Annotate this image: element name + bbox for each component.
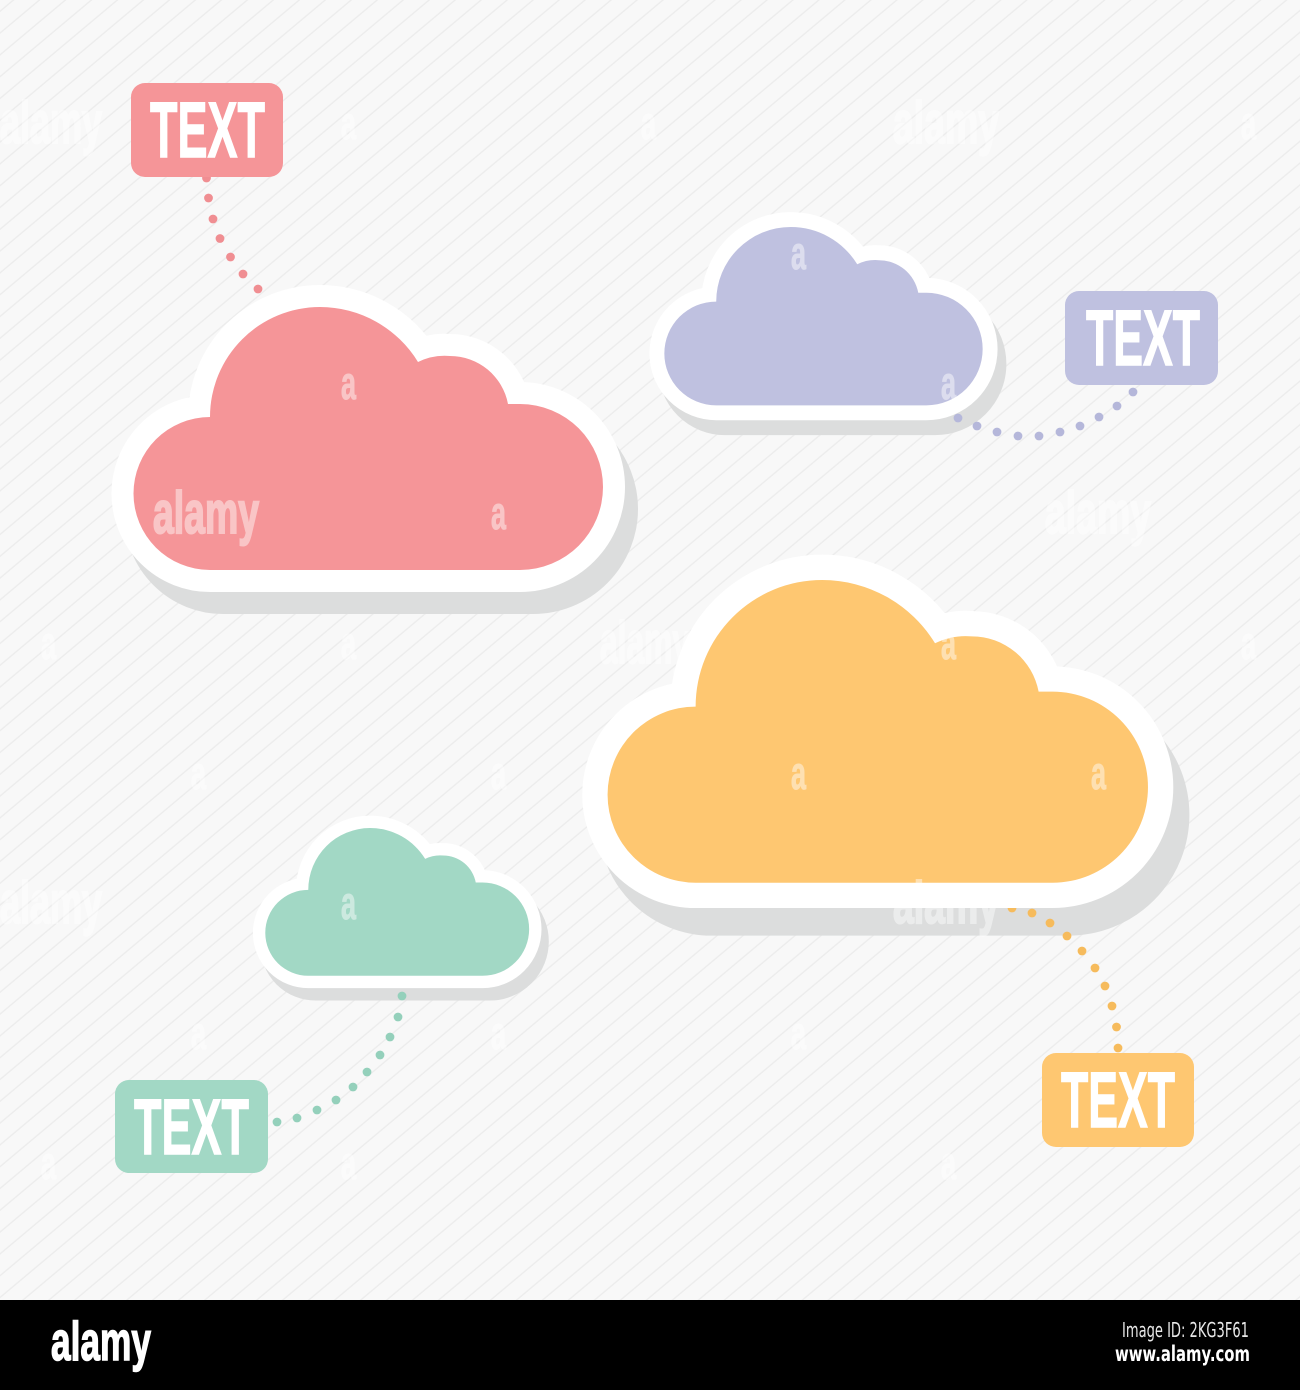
watermark: large: alamy xyxy=(1045,480,1151,546)
watermark: small marks: a xyxy=(341,1137,356,1189)
cloud: pink xyxy=(134,307,616,592)
watermark: large: alamy xyxy=(600,610,690,676)
cloud body: pink xyxy=(134,307,603,570)
cloud shadow: yellow xyxy=(624,608,1164,910)
watermark: small marks: a xyxy=(341,97,356,149)
label: green: TEXT xyxy=(134,1082,249,1171)
watermark: small marks: a xyxy=(791,1007,806,1059)
watermark: large xyxy=(0,90,1151,936)
watermark: small marks: a xyxy=(491,747,506,799)
watermark: small marks: a xyxy=(341,617,356,669)
watermark: small marks: a xyxy=(791,747,806,799)
label: purple xyxy=(1065,291,1218,385)
watermark: small marks: a xyxy=(491,1007,506,1059)
cloud shadow: purple xyxy=(673,242,991,420)
watermark: large: alamy xyxy=(0,870,102,936)
watermark: small marks xyxy=(41,97,1256,1189)
label: pink: TEXT xyxy=(150,85,265,174)
cloud: purple xyxy=(664,227,991,420)
dotted connector: pink xyxy=(202,174,262,293)
watermark: large: alamy xyxy=(0,90,102,156)
cloud body: purple xyxy=(664,227,983,405)
watermark: small marks: a xyxy=(1241,617,1256,669)
label: pink xyxy=(131,83,283,177)
watermark: small marks: a xyxy=(1241,97,1256,149)
watermark: small marks: a xyxy=(1091,747,1106,799)
watermark: small marks: a xyxy=(491,487,506,539)
cloud body: green xyxy=(265,828,529,976)
watermark: small marks: a xyxy=(341,877,356,929)
dotted connector: yellow xyxy=(1008,904,1122,1052)
cloud shadow: pink xyxy=(146,329,616,592)
watermark: small marks: a xyxy=(641,97,656,149)
cloud: green xyxy=(265,828,536,988)
watermark: large: alamy xyxy=(153,480,259,546)
footer logo: alamy xyxy=(51,1310,151,1372)
watermark: small marks: a xyxy=(941,357,956,409)
watermark: small marks: a xyxy=(791,227,806,279)
label: yellow xyxy=(1042,1053,1194,1147)
label: yellow: TEXT xyxy=(1061,1055,1175,1144)
cloud shadow: green xyxy=(273,840,536,988)
watermark: large: alamy xyxy=(893,870,999,936)
label: purple: TEXT xyxy=(1086,293,1200,382)
watermark: small marks: a xyxy=(941,1137,956,1189)
label: green xyxy=(115,1080,268,1173)
watermark: large: alamy xyxy=(893,90,999,156)
watermark: small marks: a xyxy=(41,617,56,669)
watermark: small marks: a xyxy=(41,1137,56,1189)
dotted connector: green xyxy=(273,992,406,1126)
watermark: small marks: a xyxy=(341,357,356,409)
cloud body: yellow xyxy=(608,580,1148,883)
dotted connector: purple xyxy=(954,388,1137,440)
watermark: small marks: a xyxy=(191,747,206,799)
footer bar xyxy=(0,1300,1300,1390)
watermark: small marks: a xyxy=(941,617,956,669)
watermark: small marks: a xyxy=(191,1007,206,1059)
